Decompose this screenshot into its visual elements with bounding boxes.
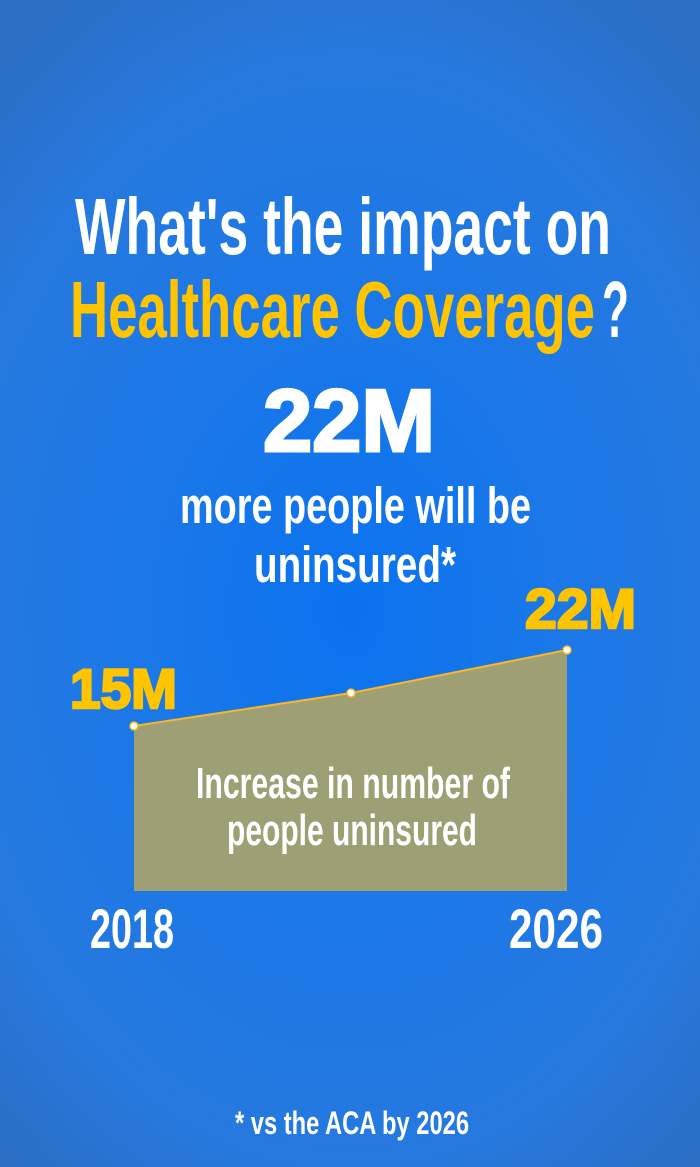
big stat: 22M: 22M: [263, 371, 435, 470]
question mark: ?: [602, 265, 629, 354]
title: [70, 182, 629, 354]
axis label 2026: 2026: [509, 897, 603, 960]
trend line: [134, 650, 567, 726]
stat description: [180, 477, 531, 593]
point 2018: [130, 722, 138, 730]
value label 15M: 15M: [70, 657, 177, 720]
description line 1: more people will be: [180, 477, 531, 534]
description line 2: uninsured*: [254, 536, 456, 593]
footnote: * vs the ACA by 2026: [235, 1105, 469, 1141]
area fill: [134, 650, 567, 891]
area chart: [70, 577, 636, 960]
point 2026: [563, 646, 571, 654]
chart caption line 2: people uninsured: [227, 806, 477, 855]
midpoint: [347, 689, 355, 697]
chart caption line 1: Increase in number of: [196, 759, 510, 808]
axis label 2018: 2018: [90, 897, 174, 960]
value label 22M: 22M: [525, 577, 636, 640]
